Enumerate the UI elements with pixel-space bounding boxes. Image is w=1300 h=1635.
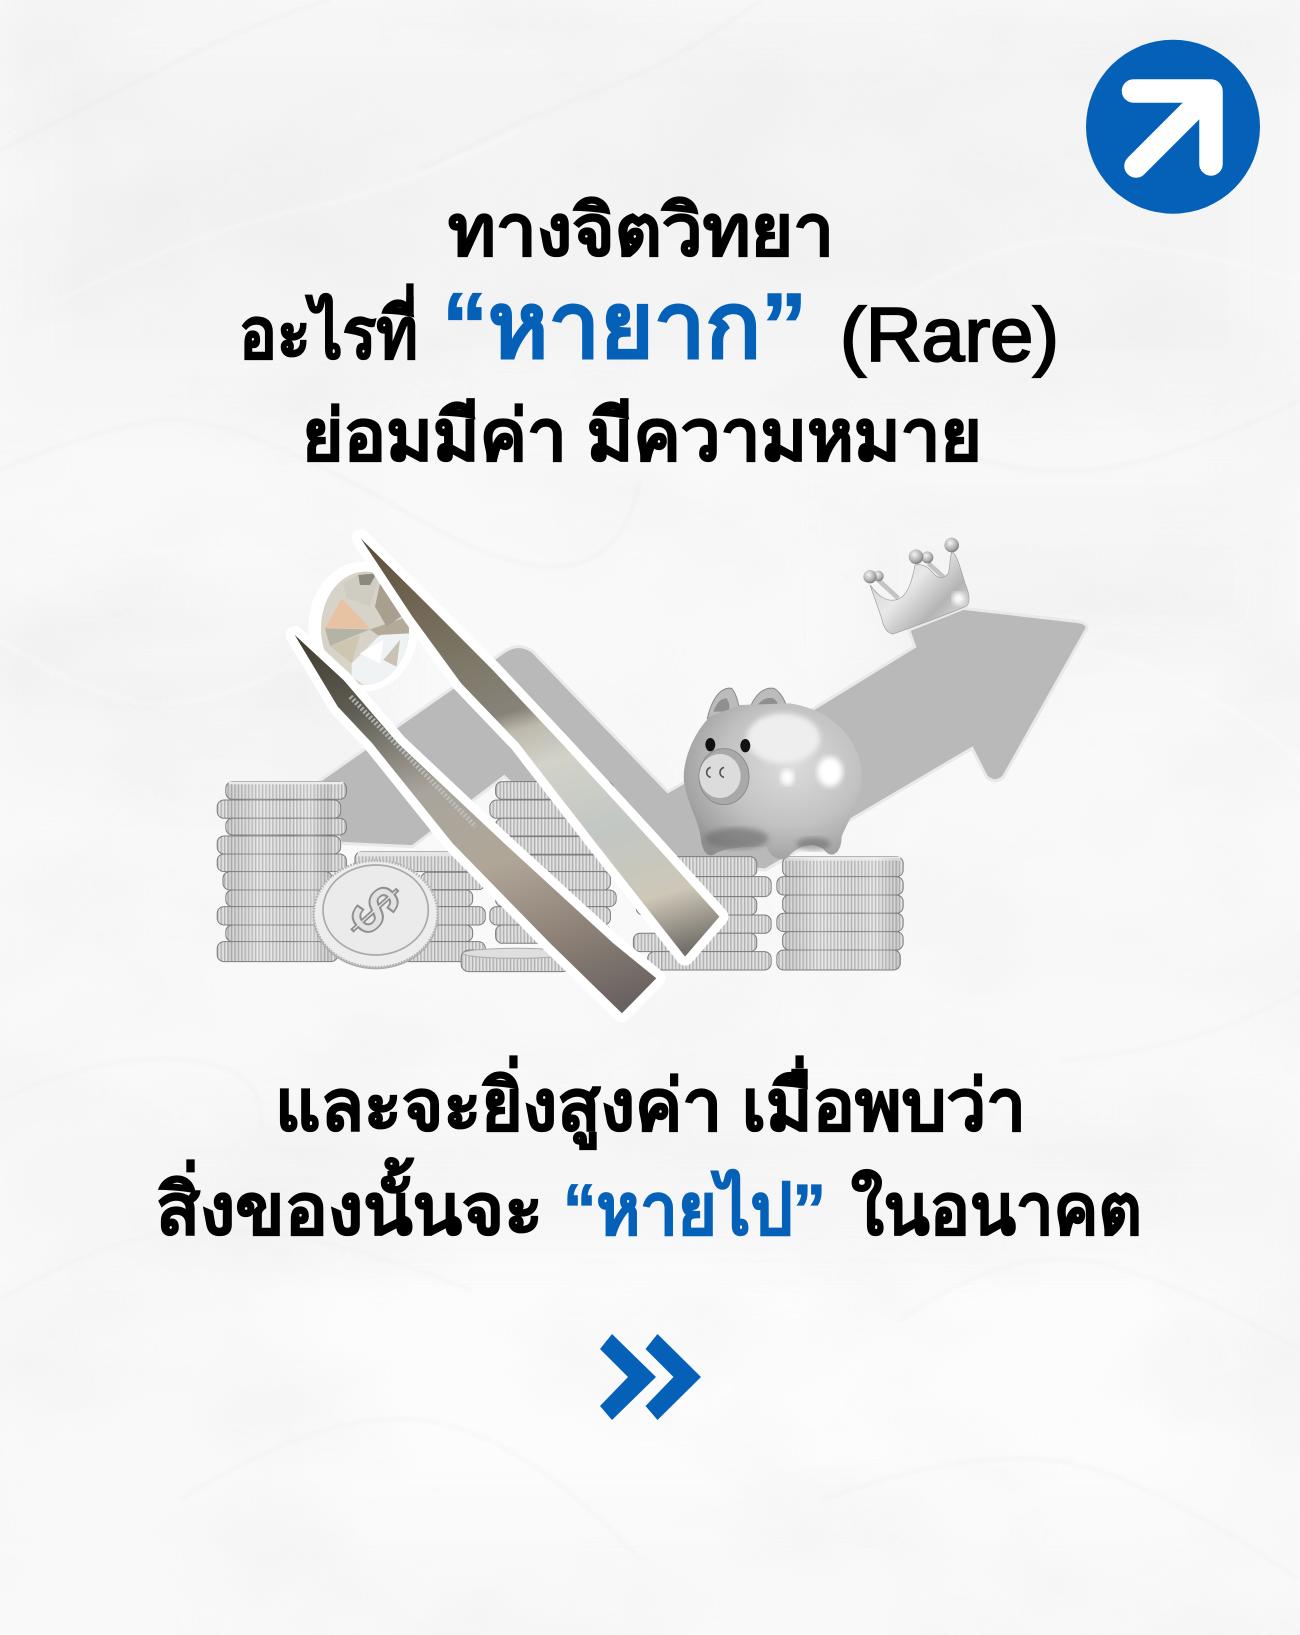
body line 2: suffix: ในอนาคต (851, 1168, 1142, 1250)
heading line 2: highlighted word: “หายาก” (442, 275, 807, 377)
tweezers: upper blade (361, 538, 719, 957)
zigzag growth arrow (321, 608, 1087, 877)
pig shading and highlights (747, 713, 820, 763)
pig snout (699, 749, 749, 805)
body line 1: และจะยิ่งสูงค่า เมื่อพบว่า (275, 1055, 1026, 1150)
heading line 2: suffix: (Rare) (840, 293, 1059, 378)
pig nostrils (707, 767, 724, 777)
body line 2: prefix: สิ่งของนั้นจะ (156, 1157, 543, 1250)
diamond (308, 562, 418, 692)
large dollar coin: $ (334, 871, 416, 949)
coin stack 1 (217, 782, 346, 962)
logo: blue circle with arrow (1086, 40, 1260, 214)
coin stack 4 (633, 857, 771, 970)
large dollar coin (313, 861, 438, 969)
body line 2: highlighted word: “หายไป” (563, 1168, 826, 1250)
coin stack 5 (777, 857, 903, 970)
silver crown (863, 538, 969, 634)
heading line 1: ทางจิตวิทยา (448, 192, 834, 271)
pig ears (707, 688, 790, 722)
body text: bottom two lines (156, 1055, 1142, 1250)
piggy bank (684, 688, 862, 859)
tweezers: lower blade (295, 635, 656, 1013)
heading line 2: prefix: อะไรที่ (239, 283, 418, 374)
tweezers (295, 538, 719, 1013)
pig eyes (705, 738, 715, 751)
tweezers: knurled grip on lower blade (350, 697, 476, 827)
pig body (684, 703, 862, 859)
coin stack 3 (490, 782, 616, 943)
heading: top three lines (239, 192, 1059, 476)
double chevron arrow (600, 1334, 701, 1420)
crown body (870, 552, 969, 634)
crown balls (873, 571, 884, 581)
flat coin (461, 948, 570, 972)
crown back prongs (878, 563, 947, 598)
coin stack 2 (355, 852, 485, 962)
heading line 3: ย่อมมีค่า มีความหมาย (302, 397, 982, 476)
illustration: silver coins, piggy bank, arrow and tweezers holding a diamond (217, 538, 1087, 1013)
arrow and coin stacks (217, 608, 1087, 972)
